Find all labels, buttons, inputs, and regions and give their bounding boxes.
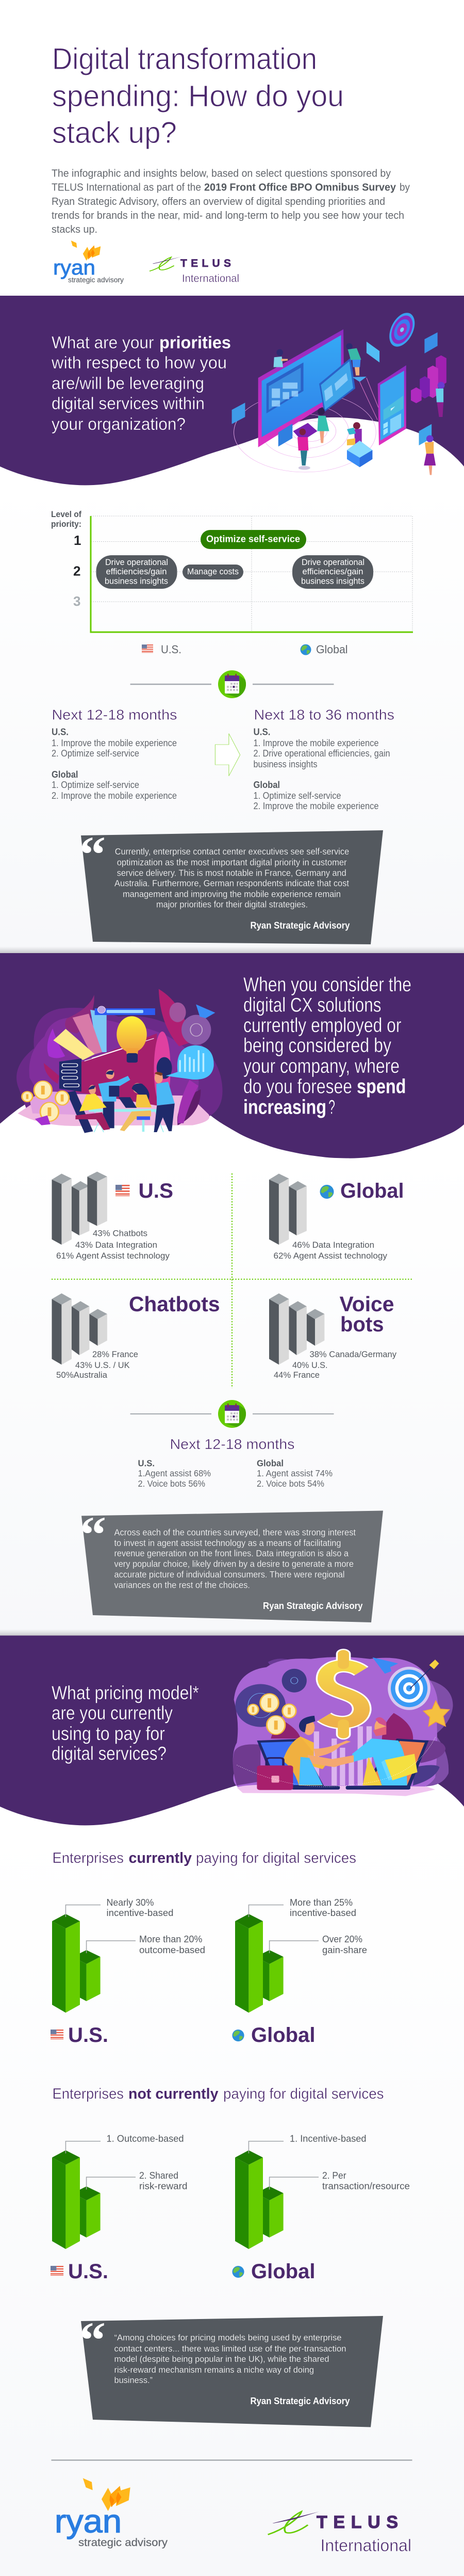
panel: priorities banner <box>0 296 464 485</box>
heading: spend question <box>243 974 411 1119</box>
icon: target <box>388 1660 439 1710</box>
heading: priorities question: with respect to how you <box>51 353 227 373</box>
callout: quote 2: very popular choice, likely driven by a desire to generate a more <box>114 1558 354 1569</box>
text block: next 12-18 months <box>52 707 177 801</box>
text block: next 18 to 36 months: 1. Optimize self-service <box>254 791 341 801</box>
quadrant: Global: 46% Data Integration <box>292 1240 374 1250</box>
quadrant: U.S.: 43% Chatbots <box>93 1228 147 1238</box>
logo: ryan strategic advisory (large): ryan <box>55 2504 122 2540</box>
text block: next 12-18 months: 2. Improve the mobile experience <box>52 791 177 801</box>
callout: quote 1: major priorities for their digital strategies. <box>156 899 308 909</box>
title <box>52 42 344 150</box>
bar chart: currently paying Global: incentive-based <box>290 1908 356 1918</box>
x-axis label: Global <box>300 643 347 656</box>
callout: quote 3: “Among choices for pricing models being used by enterprise <box>114 2332 341 2343</box>
heading: enterprises not currently paying: paying for digital services <box>223 2086 384 2102</box>
label: U.S. not currently paying <box>51 2260 108 2283</box>
logo: ryan strategic advisory (large): strategic advisory <box>78 2537 168 2549</box>
text block: next 12-18 months spend: 2. Voice bots 56% <box>138 1478 205 1489</box>
heading: priorities question: your organization? <box>52 415 186 434</box>
bar chart: not currently paying Global: 2. Per <box>322 2170 346 2181</box>
title: Digital transformation <box>52 42 317 76</box>
icon: star <box>423 1701 450 1726</box>
heading: pricing question: What pricing model* <box>52 1682 199 1703</box>
quadrant: Chatbots <box>52 1292 220 1380</box>
heading: spend question: increasing <box>243 1096 326 1119</box>
label: U.S. not currently paying: U.S. <box>68 2260 108 2283</box>
y-axis labels: 2 <box>73 564 80 579</box>
x-axis label: U.S. <box>142 643 181 656</box>
callout: quote 3: business.” <box>114 2375 153 2385</box>
panel: solutions quadrant <box>52 1172 412 1388</box>
heading: priorities question: are/will be leveraging <box>52 374 204 393</box>
callout: quote 1: management and improving the mobile experience remain <box>123 889 341 899</box>
icon: calendar divider 2 <box>130 1400 334 1428</box>
logo: ryan strategic advisory (small): strategic advisory <box>68 276 124 284</box>
heading: enterprises currently paying <box>53 1850 356 1866</box>
label: Global not currently paying: Global <box>251 2260 316 2283</box>
y-axis labels: priority: <box>51 519 81 529</box>
heading: spend question: currently employed or <box>243 1015 402 1037</box>
bar chart: not currently paying Global: transaction/resource <box>322 2181 410 2191</box>
heading: spend question: digital CX solutions <box>243 994 382 1017</box>
text block: next 18 to 36 months: business insights <box>254 759 318 769</box>
chart: level of priority <box>51 509 413 656</box>
quadrant: Chatbots: Chatbots <box>129 1292 220 1316</box>
text block: next 18 to 36 months: Global <box>254 780 280 790</box>
quadrant: Voice bots: 44% France <box>274 1370 320 1380</box>
heading: priorities question: priorities <box>159 333 231 352</box>
logo: TELUS International (small) <box>150 257 239 285</box>
text block: next 12-18 months spend: Next 12-18 months <box>170 1436 295 1452</box>
heading: enterprises currently paying: currently <box>129 1850 192 1866</box>
callout: quote 3: contact centers... there was limited use of the per-transaction <box>114 2344 346 2354</box>
panel: pricing model banner <box>0 1636 464 1825</box>
intro text: Ryan Strategic Advisory, offers an overview of digital spending priorities and <box>52 196 385 207</box>
y-axis labels: 3 <box>73 593 80 609</box>
heading: pricing question: digital services? <box>52 1743 167 1764</box>
bar chart: currently paying Global <box>235 1897 367 2013</box>
bar chart: Global <box>269 1173 307 1245</box>
pill: manage costs: Manage costs <box>187 567 239 576</box>
text block: next 12-18 months spend <box>138 1436 333 1489</box>
heading: spend question: do you foresee <box>243 1075 352 1098</box>
bar chart: currently paying U.S.: More than 20% <box>139 1934 202 1944</box>
quadrant: U.S.: U.S <box>138 1180 173 1202</box>
illustration: handshake and dollar sign <box>233 1654 453 1796</box>
heading: priorities question: What are your <box>52 333 154 352</box>
text block: next 12-18 months: Next 12-18 months <box>52 707 177 722</box>
intro text <box>52 168 410 235</box>
pill: drive operational efficiencies US: Drive operational <box>105 557 168 567</box>
logo: TELUS International (large): TELUS <box>317 2513 398 2532</box>
pill: optimize self-service <box>201 530 306 549</box>
callout: quote 3 <box>79 2311 383 2427</box>
callout: quote 1: Ryan Strategic Advisory <box>251 921 350 931</box>
text block: next 18 to 36 months <box>254 707 394 811</box>
logo: TELUS International (large): International <box>321 2536 411 2555</box>
callout: quote 1: service delivery. This is most notable in France, Germany and <box>117 868 346 878</box>
logo: TELUS International (small): TELUS <box>180 257 231 269</box>
text block: next 12-18 months: 1. Improve the mobile experience <box>52 738 177 748</box>
pill: drive operational efficiencies global <box>292 555 373 589</box>
quadrant: Chatbots: 50%Australia <box>56 1370 108 1380</box>
y-axis labels <box>51 509 81 609</box>
quadrant: Chatbots: 43% U.S. / UK <box>75 1360 130 1370</box>
quadrant: Voice bots <box>269 1292 396 1380</box>
icon: dollar sign <box>324 1654 362 1734</box>
heading: priorities question <box>51 333 231 434</box>
text block: next 12-18 months spend: 1.Agent assist 68% <box>138 1468 211 1478</box>
quadrant: Voice bots: 38% Canada/Germany <box>309 1349 396 1359</box>
heading: spend question: your company, where <box>243 1055 400 1077</box>
quadrant: Voice bots: bots <box>340 1312 384 1336</box>
heading: enterprises currently paying: Enterprises <box>53 1850 124 1866</box>
bar chart: currently paying U.S.: incentive-based <box>106 1908 173 1918</box>
logo: ryan strategic advisory (large) <box>55 2478 168 2549</box>
intro text: 2019 Front Office BPO Omnibus Survey <box>204 182 396 193</box>
callout: quote 2: variances on the rest of the choices. <box>114 1580 250 1590</box>
heading: spend question: ? <box>328 1096 335 1119</box>
quadrant: U.S.: 61% Agent Assist technology <box>56 1251 170 1261</box>
panel: spend increasing banner <box>0 953 464 1158</box>
title: spending: How do you <box>52 79 344 113</box>
pill: drive operational efficiencies US: efficiencies/gain <box>106 567 167 576</box>
heading: enterprises not currently paying: Enterprises <box>53 2086 124 2102</box>
quadrant: Global: 62% Agent Assist technology <box>273 1251 388 1261</box>
bar chart: not currently paying U.S.: 2. Shared <box>139 2170 178 2181</box>
heading: spend question: spend <box>357 1075 406 1098</box>
callout: quote 3: risk-reward mechanism remains a niche way of doing <box>114 2365 314 2375</box>
callout: quote 2: Ryan Strategic Advisory <box>263 1601 363 1611</box>
quadrant: Chatbots: 28% France <box>92 1349 138 1359</box>
callout: quote 2 <box>80 1506 383 1622</box>
text block: next 12-18 months: Global <box>52 769 78 780</box>
label: U.S. currently paying: U.S. <box>68 2024 108 2047</box>
icon: calendar divider <box>130 670 334 698</box>
heading: enterprises not currently paying: not currently <box>128 2086 219 2102</box>
callout: quote 2: accurate picture of individual consumers. There were regional <box>114 1569 344 1580</box>
label: U.S. currently paying <box>51 2024 108 2047</box>
heading: pricing question: are you currently <box>52 1702 173 1724</box>
businessman right <box>352 1738 407 1785</box>
label: Global currently paying: Global <box>251 2024 316 2047</box>
bar chart: currently paying U.S.: Nearly 30% <box>106 1897 154 1908</box>
text block: next 18 to 36 months: U.S. <box>254 727 270 737</box>
briefcase <box>257 1765 293 1790</box>
text block: next 12-18 months spend: Global <box>257 1458 284 1469</box>
quadrant: Voice bots: Voice <box>339 1292 394 1316</box>
team at table <box>89 1109 167 1112</box>
icon: quotation mark: “ <box>80 1506 106 1563</box>
heading: enterprises currently paying: paying for digital services <box>196 1850 356 1866</box>
text block: next 18 to 36 months: 2. Drive operational efficiencies, gain <box>254 748 390 759</box>
pill: optimize self-service: Optimize self-service <box>206 534 300 544</box>
bar chart: currently paying Global: Over 20% <box>322 1934 362 1944</box>
callout: quote 3: model (despite being popular in the UK), while the shared <box>114 2354 329 2364</box>
illustration: team around megaphone and light bulb <box>16 989 223 1132</box>
quadrant: U.S. <box>52 1172 173 1261</box>
bar chart: not currently paying Global: 1. Incentive-based <box>290 2133 366 2144</box>
intro text: stacks up. <box>52 224 97 235</box>
text block: next 12-18 months: U.S. <box>52 727 69 737</box>
pill: drive operational efficiencies US <box>96 555 177 589</box>
pill: drive operational efficiencies global: business insights <box>301 576 364 586</box>
text block: next 12-18 months: 1. Optimize self-service <box>52 780 139 790</box>
people <box>274 343 444 475</box>
heading: enterprises not currently paying <box>53 2086 384 2102</box>
callout: quote 1: Currently, enterprise contact center executives see self-service <box>115 846 349 857</box>
intro text: trends for brands in the near, mid- and long-term to help you see how your tech <box>52 210 404 221</box>
callout: quote 2: revenue generation on the front lines. Data integration is also a <box>114 1548 349 1558</box>
title: stack up? <box>52 116 177 150</box>
coins <box>248 1694 296 1734</box>
heading: pricing question: using to pay for <box>52 1723 165 1744</box>
intro text: The infographic and insights below, based on select questions sponsored by <box>52 168 391 180</box>
bar chart: Voice bots <box>269 1293 324 1365</box>
bar chart: not currently paying U.S.: risk-reward <box>139 2181 188 2191</box>
logo: TELUS International (small): International <box>182 272 239 285</box>
grid lines <box>91 516 412 632</box>
heading: pricing question <box>52 1682 199 1764</box>
callout: quote 1 <box>79 826 383 944</box>
x-axis label: Global: Global <box>316 643 347 656</box>
icon: quotation mark: “ <box>79 826 106 883</box>
text block: next 18 to 36 months: 1. Improve the mobile experience <box>254 738 378 748</box>
quadrant: Global <box>269 1173 404 1261</box>
intro text: TELUS International as part of the <box>52 182 201 193</box>
bar chart: not currently paying Global <box>235 2133 410 2249</box>
pill: drive operational efficiencies US: business insights <box>105 576 168 586</box>
coins <box>22 1081 69 1121</box>
callout: quote 1: Australia. Furthermore, German respondents indicate that cost <box>114 878 349 889</box>
bar chart: U.S. <box>52 1172 107 1245</box>
arrow <box>215 733 240 776</box>
bar chart: currently paying U.S. <box>52 1897 205 2013</box>
pill: drive operational efficiencies global: Drive operational <box>302 557 364 567</box>
callout: quote 2: to invest in agent assist technology as a means of facilitating <box>114 1538 341 1548</box>
heading: spend question: When you consider the <box>243 974 411 996</box>
callout: quote 2: Across each of the countries surveyed, there was strong interest <box>114 1527 356 1538</box>
logo: TELUS International (large) <box>268 2511 411 2555</box>
illustration: isometric digital workplace <box>232 310 446 475</box>
businessman left <box>296 1736 328 1785</box>
text block: next 12-18 months: 2. Optimize self-service <box>52 748 139 759</box>
quadrant: Voice bots: 40% U.S. <box>292 1360 328 1370</box>
bar chart: not currently paying U.S.: 1. Outcome-based <box>106 2133 184 2144</box>
text block: next 12-18 months spend: 2. Voice bots 54% <box>257 1478 324 1489</box>
icon: quotation mark: “ <box>79 2311 106 2369</box>
callout: quote 3: Ryan Strategic Advisory <box>251 2396 350 2406</box>
heading: priorities question: digital services within <box>52 394 205 413</box>
y-axis labels: Level of <box>51 509 81 519</box>
text block: next 18 to 36 months: Next 18 to 36 months <box>254 707 394 722</box>
bar chart: Chatbots <box>52 1293 107 1365</box>
quadrant: U.S.: 43% Data Integration <box>75 1240 157 1250</box>
laptops <box>257 1739 324 1786</box>
x-axis label: U.S.: U.S. <box>161 643 181 656</box>
pill: drive operational efficiencies global: efficiencies/gain <box>302 567 363 576</box>
bar chart: currently paying U.S.: outcome-based <box>139 1945 205 1955</box>
y-axis labels: 1 <box>74 533 81 548</box>
logo: ryan strategic advisory (small): ryan <box>53 256 95 279</box>
logo: ryan strategic advisory (small) <box>53 240 124 284</box>
quadrant: Global: Global <box>340 1180 404 1202</box>
bar chart: currently paying Global: gain-share <box>322 1945 367 1955</box>
heading: spend question: being considered by <box>243 1035 391 1057</box>
text block: next 12-18 months spend: U.S. <box>138 1458 155 1469</box>
bar chart: not currently paying U.S. <box>52 2133 188 2249</box>
text block: next 12-18 months spend: 1. Agent assist 74% <box>257 1468 333 1478</box>
text block: next 18 to 36 months: 2. Improve the mobile experience <box>254 801 378 811</box>
bar chart: currently paying Global: More than 25% <box>290 1897 353 1908</box>
pill: manage costs <box>183 565 243 579</box>
dividers <box>52 1173 412 1388</box>
callout: quote 1: optimization as the most important digital priority in customer <box>117 857 347 867</box>
intro text: by <box>400 182 410 193</box>
